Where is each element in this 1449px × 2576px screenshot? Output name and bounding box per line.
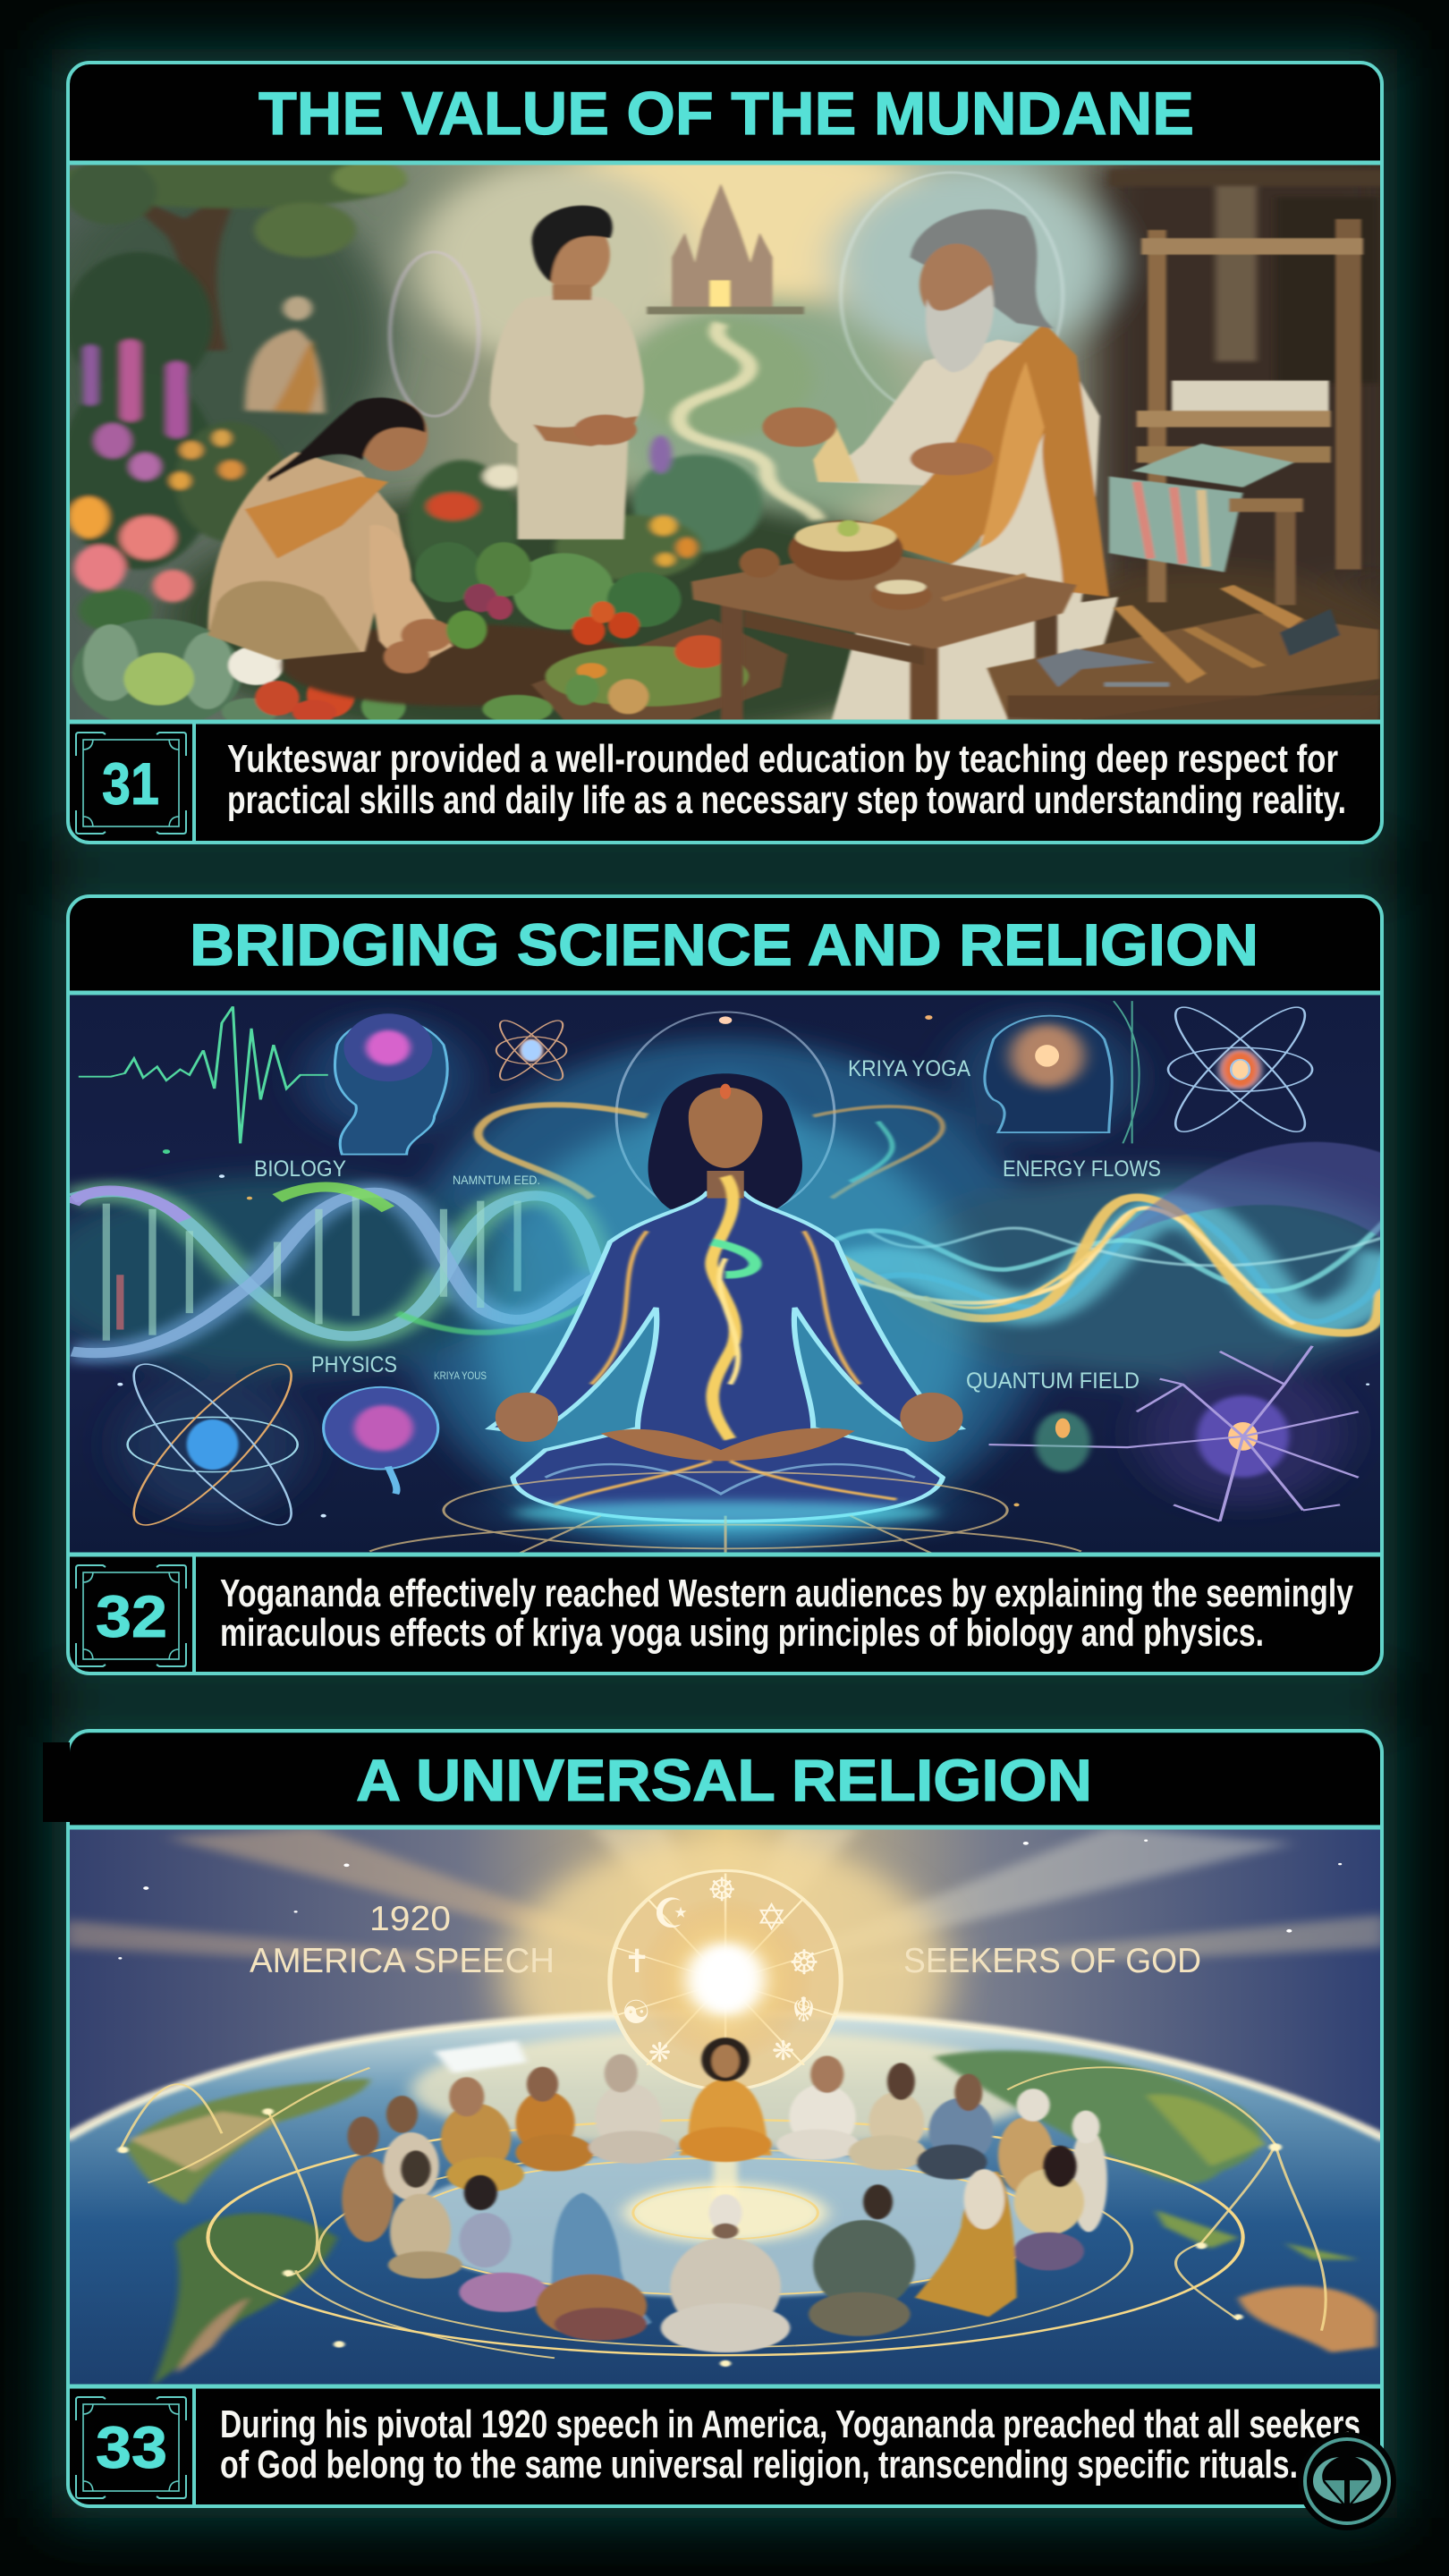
base rings [369, 1472, 1081, 1554]
central sun flare [689, 1944, 762, 2014]
wheel symbols: ❋ [772, 2036, 794, 2067]
caption bar [70, 723, 1380, 841]
lower brain [324, 1387, 438, 1494]
woman [208, 397, 487, 674]
wheel symbols: ❋ [648, 2038, 671, 2069]
background gardener [245, 296, 326, 413]
neuron [989, 1346, 1359, 1521]
caption bar [70, 1555, 1380, 1672]
wheel symbols: ☬ [792, 1990, 816, 2029]
cabbage [72, 619, 406, 728]
labels inside illustration: KRIYA YOUS [434, 1369, 487, 1382]
seekers seated: front row [388, 2146, 1084, 2352]
guru [762, 209, 1118, 720]
wheel symbols: ✡ [756, 1895, 787, 1939]
head with brain [335, 1013, 447, 1155]
panel: a universal religion [43, 1731, 1386, 2506]
wheel symbols [622, 1872, 819, 2069]
bush and flowers [60, 252, 286, 632]
symbol wheel [610, 1870, 841, 2089]
wall and window [1109, 170, 1386, 384]
ECG trace [79, 1006, 328, 1143]
yellow swirl upper [479, 1105, 943, 1199]
title bar [70, 898, 1380, 992]
glowing floor [402, 2150, 1049, 2298]
stars [118, 1840, 1342, 1960]
panel: bridging science and religion [28, 896, 1423, 1674]
labels inside illustration: KRIYA YOGA [848, 1056, 970, 1081]
number badge 32 [76, 1565, 186, 1666]
labels inside illustration: 1920 [369, 1900, 451, 1938]
caption bar [70, 2386, 1380, 2504]
wheel symbols: ☸ [708, 1872, 736, 1909]
labels inside illustration: PHYSICS [311, 1352, 397, 1377]
illustration: garden teaching scene [70, 165, 1380, 719]
illustration: circle of seekers on the globe [64, 1826, 1386, 2396]
panel border [68, 1731, 1382, 2506]
panel border [68, 63, 1382, 843]
labels inside illustration: ENERGY FLOWS [1003, 1157, 1161, 1182]
central garden [407, 436, 762, 591]
labels inside illustration: AMERICA SPEECH [250, 1942, 555, 1980]
soil [282, 624, 642, 707]
labels inside illustration [250, 1900, 1201, 1980]
network lines [120, 2067, 1326, 2358]
labels inside illustration: NAMNTUM EED. [453, 1173, 540, 1187]
wheel symbols: ☪ [653, 1889, 690, 1937]
tree [55, 153, 407, 351]
wheel symbols: ☸ [789, 1943, 819, 1982]
workbench with tools [987, 585, 1379, 720]
earth [64, 2013, 1386, 2396]
number badge 31 [76, 733, 186, 834]
number badge 33 [76, 2397, 186, 2498]
crate [482, 619, 787, 724]
heading: THE VALUE OF THE MUNDANE [258, 80, 1194, 148]
title bar [70, 64, 1380, 162]
boy [490, 206, 644, 539]
icon: logo badge [1298, 2432, 1396, 2530]
halo [616, 1012, 835, 1220]
DNA helix [72, 1187, 601, 1353]
dividers [68, 1827, 1382, 2506]
caption text [220, 1572, 1353, 1655]
panel border [68, 896, 1382, 1674]
labels inside illustration: QUANTUM FIELD [966, 1368, 1140, 1394]
temple [647, 183, 804, 314]
wheel symbols: ☯ [622, 1995, 650, 2031]
golden path [629, 318, 813, 438]
heading: BRIDGING SCIENCE AND RELIGION [190, 911, 1258, 978]
stars [117, 1015, 1369, 1517]
wheel symbols: ✝ [623, 1944, 650, 1980]
labels inside illustration: SEEKERS OF GOD [903, 1942, 1201, 1980]
atom small [490, 1017, 572, 1084]
panel: the value of the mundane [37, 63, 1423, 843]
central vegetables [415, 542, 681, 645]
energy waves [832, 1142, 1386, 1333]
seekers seated: back row [342, 2038, 1107, 2241]
number badge 33: 33 [96, 2414, 167, 2480]
caption text [220, 2402, 1360, 2487]
number badge 31: 31 [102, 750, 159, 817]
atom lower left [108, 1354, 317, 1535]
meditating figure [476, 1073, 975, 1538]
continents [124, 2040, 1377, 2385]
labels inside illustration: BIOLOGY [254, 1157, 346, 1182]
number badge 32: 32 [96, 1583, 167, 1649]
illustration: meditating figure with science motifs [28, 990, 1423, 1560]
loom [1109, 219, 1363, 605]
labels inside illustration [254, 1056, 1161, 1394]
atom large right [1157, 1000, 1325, 1140]
heading: A UNIVERSAL RELIGION [356, 1747, 1092, 1813]
right head [985, 1001, 1140, 1143]
caption text [227, 737, 1346, 822]
table [691, 521, 1077, 720]
title bar [43, 1733, 1380, 1825]
